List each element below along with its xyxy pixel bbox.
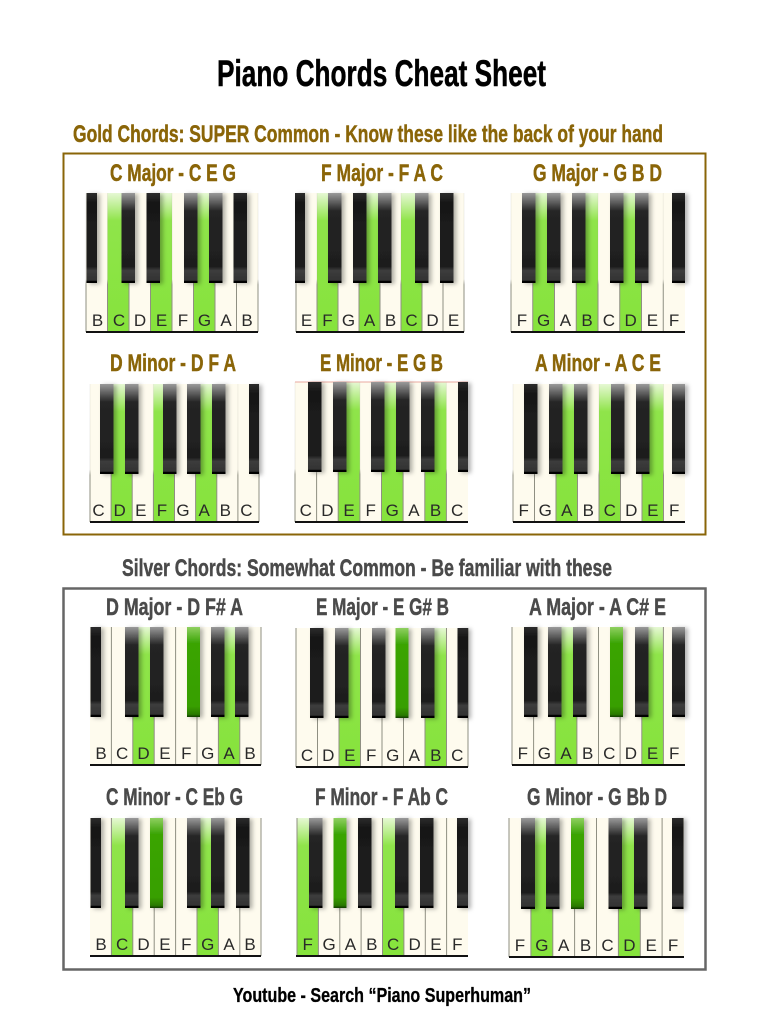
label: F Major: F Major - F A C xyxy=(321,160,443,187)
keyboard: A Minor: F xyxy=(669,501,679,520)
keyboard: F Minor: F xyxy=(303,935,313,954)
keyboard: E Minor: F xyxy=(366,501,376,520)
label: E Minor: E Minor - E G B xyxy=(320,350,443,377)
keyboard: G Minor: F xyxy=(515,936,525,955)
title: Piano Chords Cheat Sheet xyxy=(217,53,546,94)
keyboard: G Major: C xyxy=(603,311,615,330)
keyboard: C Major xyxy=(86,193,258,332)
keyboard: G Major: F xyxy=(517,311,527,330)
keyboard: D Major: C xyxy=(116,744,128,763)
keyboard: F Minor: E xyxy=(430,935,442,954)
keyboard: E Major: D xyxy=(322,746,334,765)
keyboard: A Minor: E xyxy=(647,501,658,520)
keyboard: A Major: D xyxy=(625,744,637,763)
keyboard: A Major: F xyxy=(669,744,679,763)
keyboard: D Minor: A xyxy=(199,501,211,520)
keyboard: G Minor: E xyxy=(646,936,657,955)
label: A Minor: A Minor - A C E xyxy=(535,350,661,377)
keyboard: F Major: A xyxy=(364,311,376,330)
keyboard: D Major xyxy=(90,627,261,765)
keyboard: C Major: F xyxy=(178,311,188,330)
keyboard: E Minor: C xyxy=(300,501,312,520)
panel: gold chords xyxy=(64,154,706,534)
keyboard: A Minor: B xyxy=(583,501,594,520)
keyboard: C Major: G xyxy=(198,311,211,330)
keyboard: D Major: D xyxy=(137,744,150,763)
keyboard: D Major: G xyxy=(201,744,214,763)
keyboard: E Minor: B xyxy=(430,501,441,520)
keyboard: C Minor: E xyxy=(159,935,171,954)
keyboard: A Minor: F xyxy=(519,501,529,520)
keyboard: C Minor: G xyxy=(201,935,214,954)
keyboard: D Minor xyxy=(90,384,259,522)
keyboard: D Minor: C xyxy=(240,501,253,520)
keyboard: G Minor xyxy=(509,818,684,957)
keyboard: D Major: B xyxy=(95,744,107,763)
keyboard: D Minor: E xyxy=(135,501,146,520)
keyboard: A Major: F xyxy=(518,744,528,763)
keyboard: E Major xyxy=(296,628,468,767)
keyboard: E Minor: A xyxy=(408,501,420,520)
panel: silver chords xyxy=(64,588,706,970)
keyboard: D Minor: C xyxy=(92,501,105,520)
keyboard: C Minor: D xyxy=(137,935,150,954)
keyboard: E Major: B xyxy=(430,746,441,765)
keyboard: A Major: C xyxy=(603,744,615,763)
label: E Major: E Major - E G# B xyxy=(316,594,449,621)
keyboard: C Minor: A xyxy=(223,935,235,954)
keyboard: F Minor: C xyxy=(387,935,399,954)
keyboard: A Major: E xyxy=(647,744,658,763)
keyboard: E Major: C xyxy=(451,746,463,765)
keyboard: A Minor xyxy=(513,384,685,522)
keyboard: C Minor: B xyxy=(244,935,256,954)
keyboard: E Major: A xyxy=(409,746,421,765)
keyboard: A Minor: D xyxy=(625,501,637,520)
keyboard: C Major: B xyxy=(241,311,253,330)
keyboard: G Minor: D xyxy=(623,936,636,955)
keyboard: F Minor: A xyxy=(345,935,357,954)
keyboard: G Minor: B xyxy=(580,936,591,955)
keyboard: F Minor: B xyxy=(366,935,377,954)
keyboard: G Major: D xyxy=(624,311,637,330)
label: G Major: G Major - G B D xyxy=(533,160,662,187)
keyboard: G Major: E xyxy=(647,311,658,330)
keyboard: E Major: F xyxy=(366,746,376,765)
keyboard: G Minor: C xyxy=(601,936,614,955)
keyboard: G Major: B xyxy=(581,311,593,330)
keyboard: E Major: G xyxy=(386,746,399,765)
keyboard: A Major: A xyxy=(560,744,572,763)
keyboard: G Minor: A xyxy=(558,936,570,955)
keyboard: D Major: F xyxy=(181,744,191,763)
keyboard: D Major: B xyxy=(244,744,256,763)
keyboard: E Minor: G xyxy=(386,501,399,520)
label: C Major: C Major - C E G xyxy=(110,160,236,187)
keyboard: E Minor: C xyxy=(451,501,463,520)
keyboard: F Major: E xyxy=(448,311,459,330)
keyboard: C Minor xyxy=(90,818,261,956)
footer: Youtube - Search “Piano Superhuman” xyxy=(233,985,531,1007)
keyboard: A Major: G xyxy=(538,744,551,763)
keyboard: F Major: B xyxy=(385,311,396,330)
label: D Major: D Major - D F# A xyxy=(106,594,243,621)
label: G Minor: G Minor - G Bb D xyxy=(527,784,667,811)
keyboard: A Major: B xyxy=(582,744,593,763)
keyboard: E Minor: E xyxy=(343,501,355,520)
keyboard: C Major: C xyxy=(113,311,125,330)
keyboard: G Major: G xyxy=(537,311,550,330)
keyboard: C Major: A xyxy=(220,311,232,330)
keyboard: D Minor: G xyxy=(176,501,190,520)
keyboard: G Major xyxy=(511,193,685,332)
keyboard: C Major: E xyxy=(156,311,167,330)
label: D Minor: D Minor - D F A xyxy=(110,350,236,377)
keyboard: E Minor: D xyxy=(321,501,334,520)
keyboard: D Minor: B xyxy=(220,501,231,520)
keyboard: C Minor: B xyxy=(95,935,107,954)
keyboard: A Minor: A xyxy=(561,501,573,520)
keyboard: D Major: E xyxy=(159,744,171,763)
keyboard: E Major: C xyxy=(301,746,313,765)
label: A Major: A Major - A C# E xyxy=(529,594,666,621)
keyboard: F Minor: G xyxy=(322,935,336,954)
keyboard: G Major: F xyxy=(669,311,679,330)
keyboard: F Minor: D xyxy=(408,935,421,954)
keyboard: E Major: E xyxy=(344,746,355,765)
keyboard: G Minor: G xyxy=(535,936,549,955)
keyboard: F Major: D xyxy=(426,311,439,330)
keyboard: A Minor: G xyxy=(539,501,552,520)
keyboard: F Major: F xyxy=(322,311,333,330)
keyboard: A Major xyxy=(512,627,685,765)
label: C Minor: C Minor - C Eb G xyxy=(106,784,243,811)
keyboard: F Major xyxy=(295,193,464,332)
keyboard: F Minor xyxy=(296,818,468,956)
keyboard: F Major: E xyxy=(301,311,312,330)
keyboard: F Minor: F xyxy=(452,935,462,954)
keyboard: G Minor: F xyxy=(668,936,678,955)
keyboard: A Minor: C xyxy=(604,501,616,520)
keyboard: F Major: C xyxy=(405,311,418,330)
keyboard: C Major: B xyxy=(92,311,103,330)
keyboard: D Major: A xyxy=(223,744,235,763)
keyboard: F Major: G xyxy=(342,311,355,330)
keyboard: D Minor: D xyxy=(114,501,126,520)
keyboard: G Major: A xyxy=(560,311,572,330)
keyboard: C Minor: C xyxy=(116,935,128,954)
label: F Minor: F Minor - F Ab C xyxy=(315,784,448,811)
keyboard: C Major: D xyxy=(134,311,146,330)
keyboard: C Minor: F xyxy=(181,935,191,954)
keyboard: E Minor xyxy=(295,382,468,522)
keyboard: D Minor: F xyxy=(157,501,167,520)
